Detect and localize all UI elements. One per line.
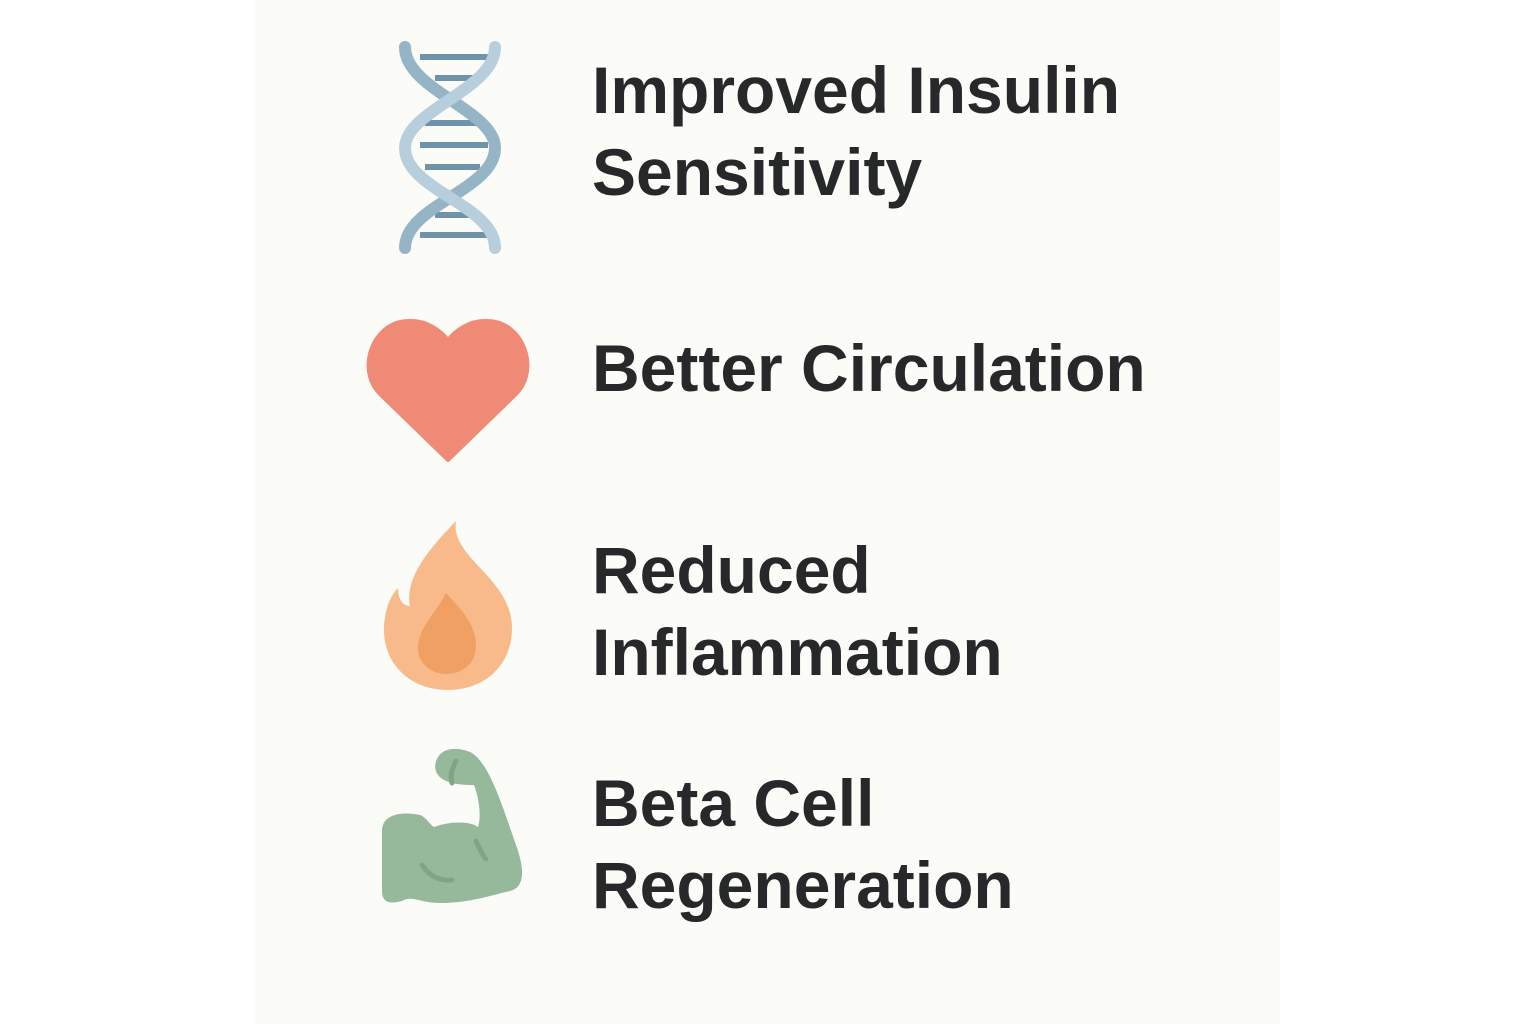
heading: Reduced Inflammation [592, 533, 1003, 689]
heading: Better Circulation: Better Circulation [592, 331, 1146, 405]
heading: Reduced Inflammation: Reduced [592, 533, 871, 607]
heading: Improved Insulin Sensitivity [592, 53, 1120, 209]
icon: DNA helix [399, 41, 501, 254]
icon: flame [384, 521, 512, 690]
heading: Reduced Inflammation: Inflammation [592, 615, 1003, 689]
heading: Beta Cell Regeneration: Regeneration [592, 848, 1014, 922]
heading: Beta Cell Regeneration: Beta Cell [592, 766, 874, 840]
icon: heart [366, 318, 530, 462]
heading: Improved Insulin Sensitivity: Sensitivity [592, 135, 922, 209]
heading: Beta Cell Regeneration [592, 766, 1014, 922]
heading: Improved Insulin Sensitivity: Improved Insulin [592, 53, 1120, 127]
icon: flexed arm [382, 748, 522, 903]
